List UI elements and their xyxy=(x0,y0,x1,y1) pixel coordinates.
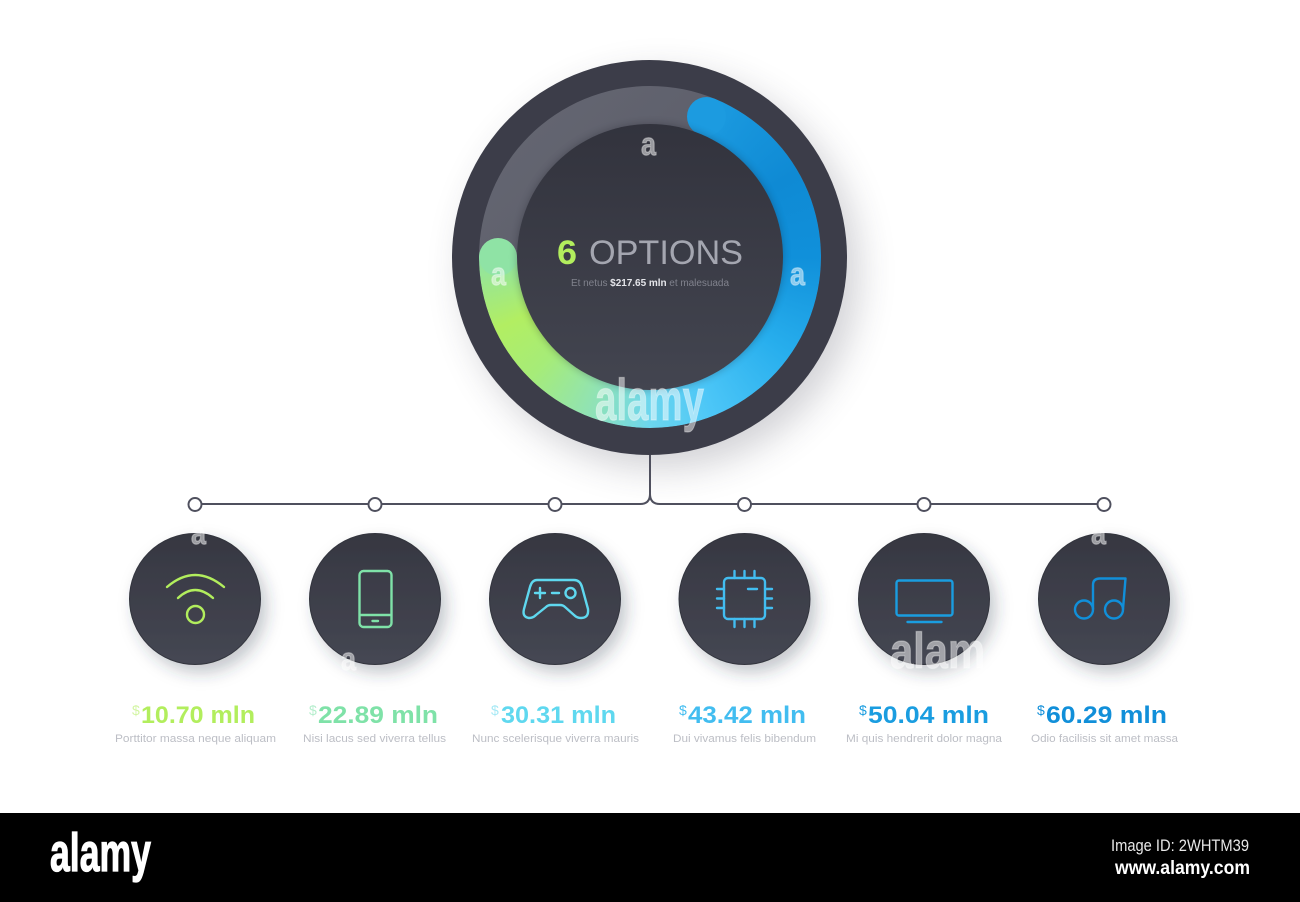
watermarks: a xyxy=(191,515,206,551)
disc 6 xyxy=(1038,534,1170,664)
caption 4: Dui vivamus felis bibendum xyxy=(673,733,816,745)
value 1: 10.70 mln xyxy=(141,702,255,729)
disc 4 xyxy=(679,534,810,664)
option 4: chip xyxy=(673,534,816,745)
caption 2: Nisi lacus sed viverra tellus xyxy=(303,733,447,745)
connector lines xyxy=(188,455,1110,511)
ring track xyxy=(479,86,821,428)
donut gauge xyxy=(448,58,875,485)
arc end cap xyxy=(479,238,517,276)
caption 3: Nunc scelerisque viverra mauris xyxy=(472,733,640,745)
value 3: $ xyxy=(491,702,499,718)
watermarks xyxy=(191,126,1106,679)
footer bar xyxy=(0,813,1300,902)
watermarks: a xyxy=(491,256,506,292)
watermarks: a xyxy=(641,126,656,162)
outer dark disc xyxy=(452,60,847,455)
disc 5 xyxy=(858,534,990,664)
watermarks: alam xyxy=(890,623,985,679)
footer logo: alamy xyxy=(50,823,151,883)
disc 3 xyxy=(490,534,620,664)
option 1: wifi xyxy=(115,534,276,745)
watermarks: alamy xyxy=(595,368,704,433)
value 2: $ xyxy=(309,702,317,718)
caption 6: Odio facilisis sit amet massa xyxy=(1031,733,1179,745)
option 2: phone xyxy=(303,534,447,745)
disc 1 xyxy=(130,534,260,664)
footer image id: Image ID: 2WHTM39 xyxy=(1111,836,1249,855)
gradient progress arc xyxy=(479,86,821,428)
icon: music note xyxy=(1075,578,1126,618)
title word: OPTIONS xyxy=(589,234,743,272)
option 3: gamepad xyxy=(472,534,640,745)
option 6: music xyxy=(1031,534,1179,745)
value 3: 30.31 mln xyxy=(501,702,616,729)
value 4: $ xyxy=(679,702,687,718)
icon: phone xyxy=(360,571,392,627)
center title xyxy=(557,234,743,289)
value 4: 43.42 mln xyxy=(688,702,806,729)
value 1: $ xyxy=(132,702,140,718)
caption 1: Porttitor massa neque aliquam xyxy=(115,733,276,745)
caption 5: Mi quis hendrerit dolor magna xyxy=(846,733,1003,745)
value 6: $ xyxy=(1037,702,1045,718)
value 5: $ xyxy=(859,702,867,718)
footer url: www.alamy.com xyxy=(1114,858,1250,879)
watermarks: a xyxy=(341,641,356,677)
value 2: 22.89 mln xyxy=(318,702,438,729)
icon: chip xyxy=(717,571,772,627)
value 6: 60.29 mln xyxy=(1046,702,1167,729)
option 5: monitor xyxy=(846,534,1003,745)
value 5: 50.04 mln xyxy=(868,702,989,729)
center subtitle: Et netus $217.65 mln et malesuada xyxy=(571,278,729,289)
icon: gamepad xyxy=(524,580,588,618)
inner disc xyxy=(517,124,783,390)
title number: 6 xyxy=(557,234,577,272)
watermarks: a xyxy=(1091,515,1106,551)
watermarks: a xyxy=(790,256,805,292)
icon: monitor xyxy=(896,580,952,622)
arc start cap xyxy=(687,97,726,136)
disc 2 xyxy=(310,534,440,664)
icon: wifi xyxy=(167,575,224,623)
